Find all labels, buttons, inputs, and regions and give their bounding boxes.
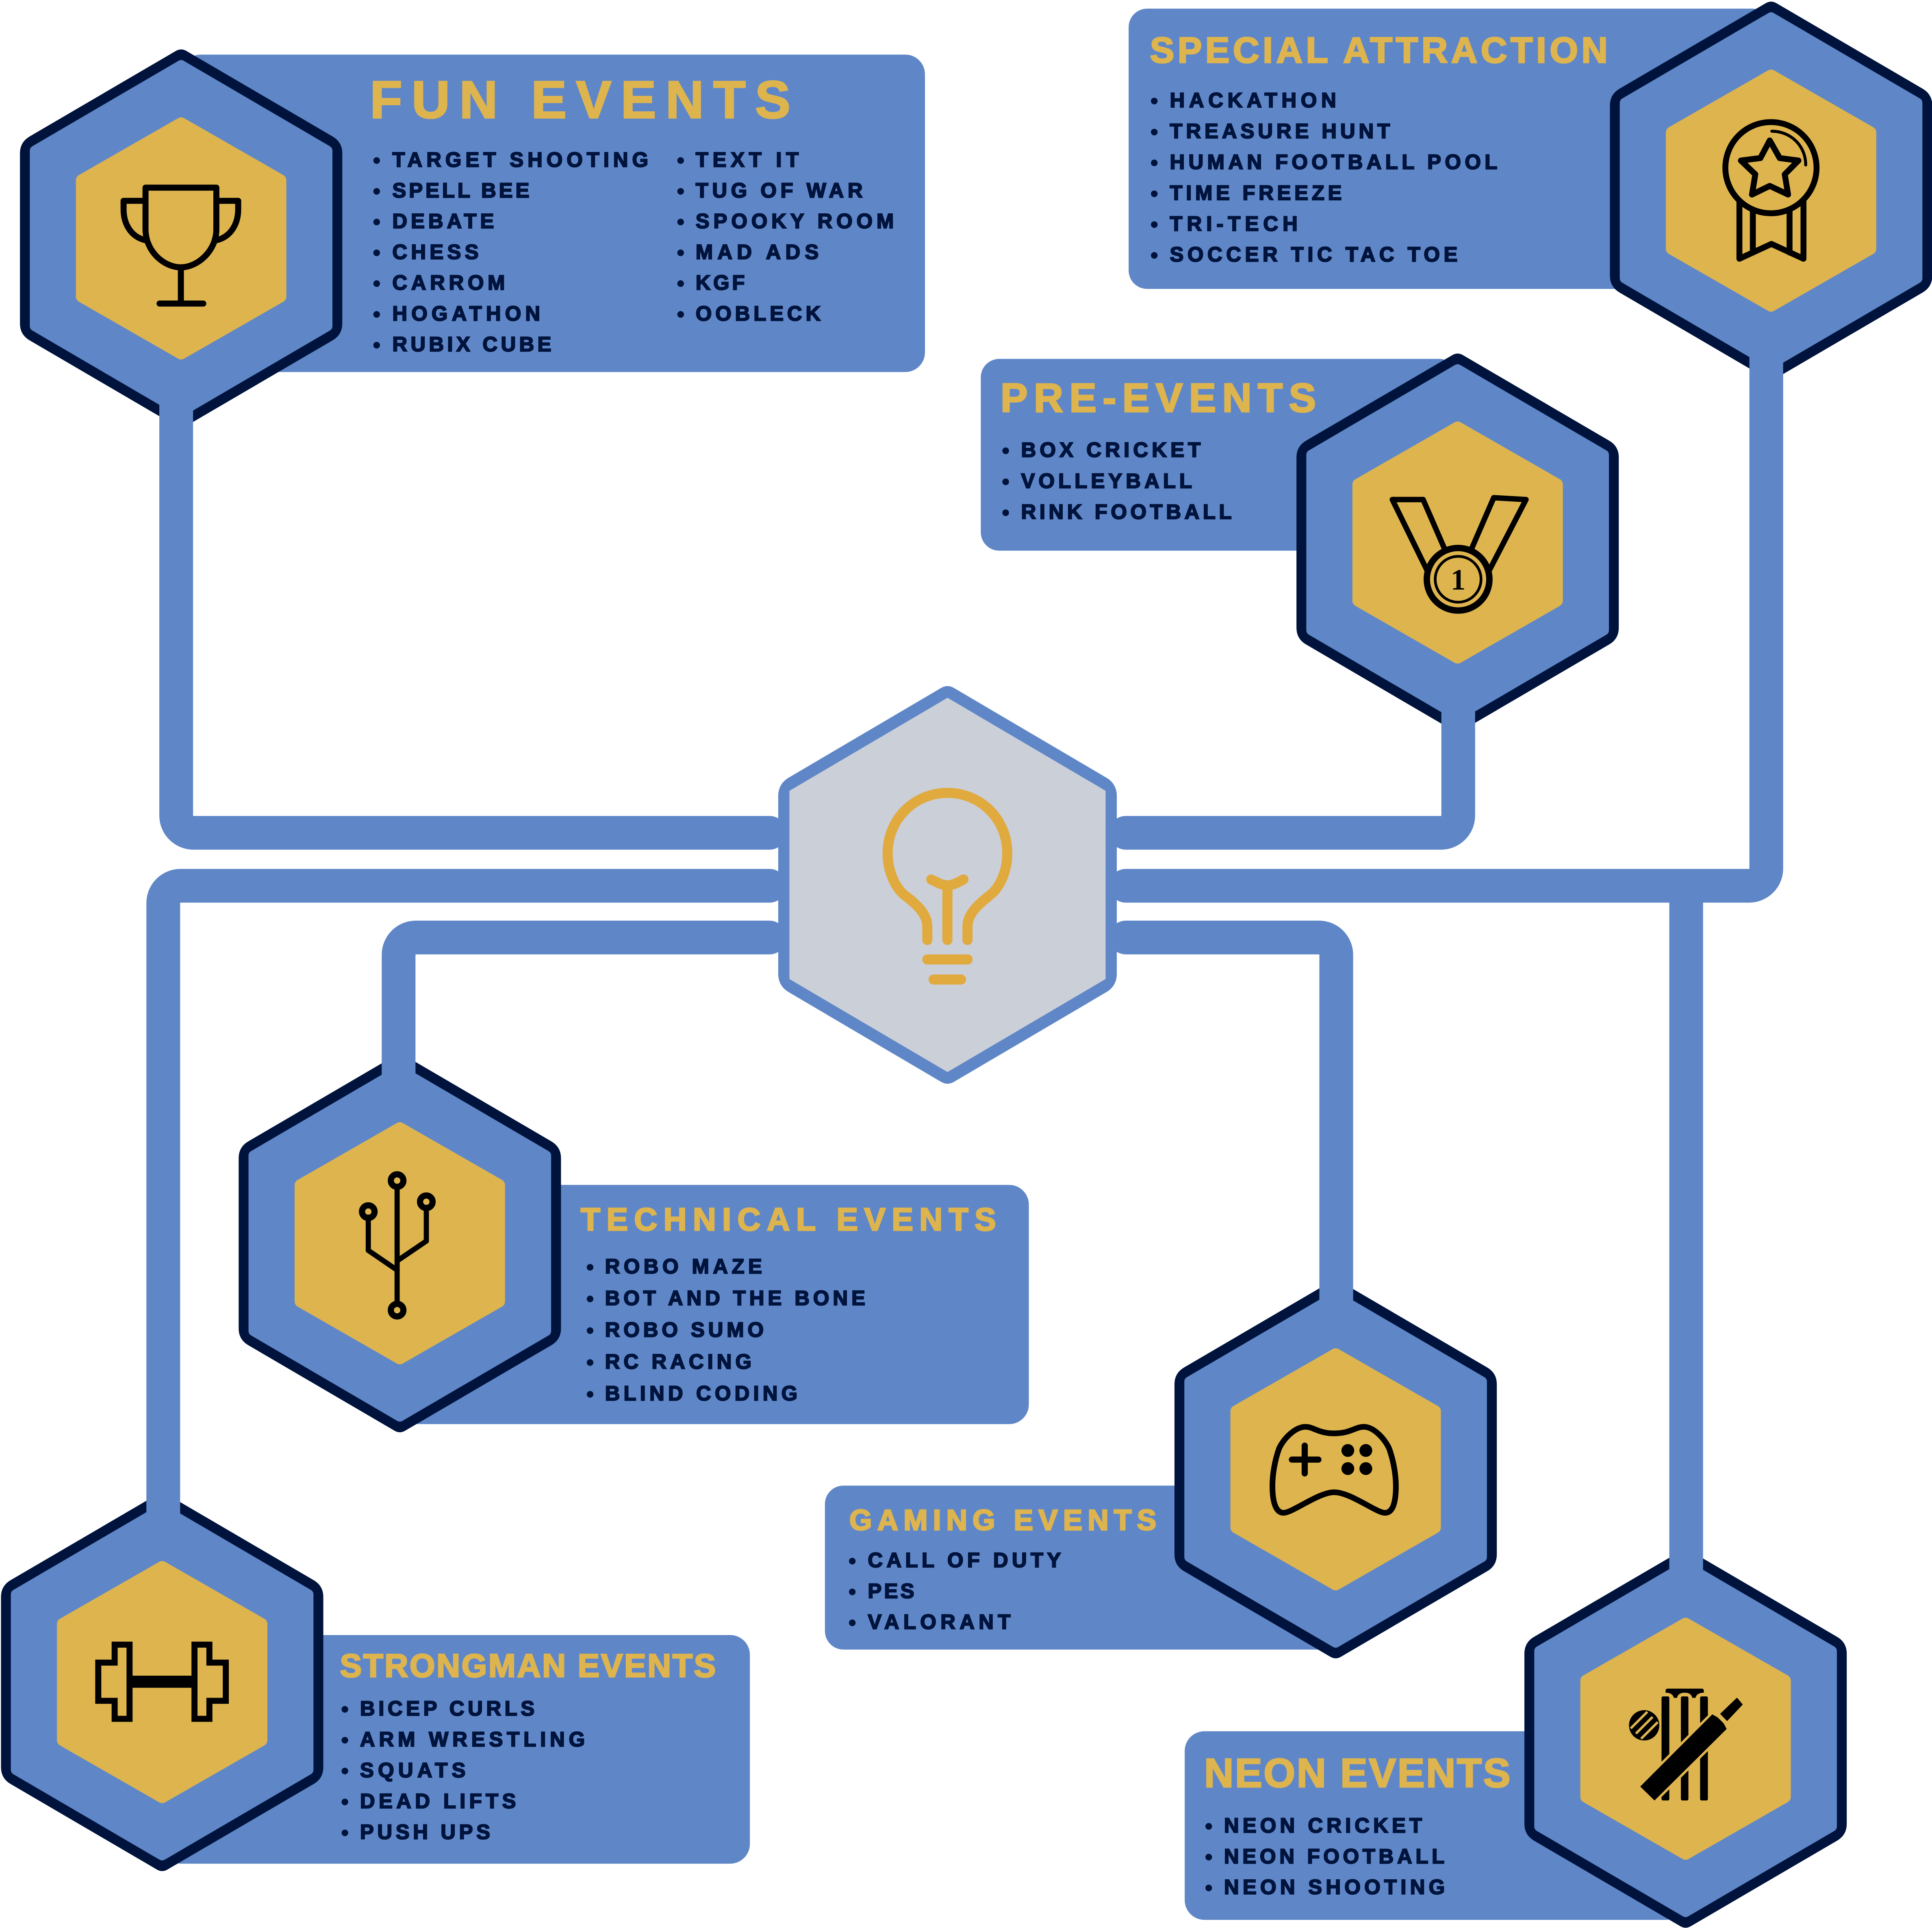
list: fun events column two: KGF [696,271,745,294]
list: technical events: ROBO SUMO [605,1318,764,1341]
list: fun events column two: TEXT IT [696,148,799,171]
connectors from centre hub to each event hexagon [163,345,1766,1589]
icon: light bulb [888,793,1007,980]
list: fun events column one: SPELL BEE [392,179,529,202]
list: pre-events [1002,438,1232,523]
panel: neon events [1185,1731,1686,1920]
hexagon: gaming events [1174,1280,1497,1658]
panel: special attraction [1129,9,1771,289]
list: technical events: ROBO MAZE [605,1255,762,1278]
icon: trophy [124,188,238,304]
list: fun events column one [373,148,648,356]
list: fun events column two [677,148,894,325]
list: fun events column one: CARROM [392,271,505,294]
list: technical events: RC RACING [605,1350,751,1373]
list: pre-events: RINK FOOTBALL [1021,500,1232,523]
list: neon events [1205,1814,1445,1899]
list: neon events: NEON CRICKET [1224,1814,1422,1837]
centre hexagon hub [778,686,1117,1084]
list: fun events column two: SPOOKY ROOM [696,210,894,233]
hexagon: strongman events [1,1493,323,1871]
list: technical events [587,1255,865,1405]
hexagon: fun events [20,50,342,427]
heading: technical events: TECHNICAL EVENTS [581,1201,996,1237]
heading: fun events: FUN EVENTS [370,70,790,129]
list: neon events: NEON FOOTBALL [1224,1845,1444,1868]
list: strongman events: BICEP CURLS [360,1697,534,1720]
list: neon events: NEON SHOOTING [1224,1876,1445,1899]
list: fun events column one: CHESS [392,240,479,263]
list: technical events: BOT AND THE BONE [605,1286,865,1310]
heading: neon events: NEON EVENTS [1204,1750,1510,1796]
list: special attraction [1151,89,1497,266]
icon: usb circuit [362,1174,432,1316]
list: fun events column two: TUG OF WAR [696,179,863,202]
list: fun events column one: TARGET SHOOTING [392,148,648,171]
list: fun events column one: DEBATE [392,210,494,233]
panel: fun events [181,54,925,372]
panel: gaming events [825,1486,1336,1650]
heading: strongman events: STRONGMAN EVENTS [340,1648,716,1684]
list: gaming events: PES [868,1579,914,1603]
panel: strongman events [161,1635,750,1864]
hexagon: pre-events [1296,354,1619,731]
icon: first place medal [1392,498,1526,611]
hexagon: technical events [239,1054,561,1432]
list: special attraction: HACKATHON [1170,89,1336,112]
icon: rosette medal with star [1726,122,1817,259]
list: strongman events [341,1697,585,1843]
list: strongman events: PUSH UPS [360,1820,490,1843]
list: pre-events: BOX CRICKET [1021,438,1200,462]
panel: pre-events [981,359,1458,551]
list: special attraction: TRI-TECH [1170,212,1298,235]
list: gaming events: CALL OF DUTY [868,1548,1061,1572]
list: technical events: BLIND CODING [605,1382,797,1405]
panel: technical events [399,1185,1029,1424]
heading: gaming events: GAMING EVENTS [849,1505,1156,1537]
list: strongman events: SQUATS [360,1759,465,1782]
list: fun events column two: OOBLECK [696,302,821,325]
icon: dumbbell [98,1645,226,1719]
list: fun events column one: HOGATHON [392,302,540,325]
heading: pre-events: PRE-EVENTS [1001,375,1316,421]
list: strongman events: DEAD LIFTS [360,1789,516,1813]
list: pre-events: VOLLEYBALL [1021,469,1192,492]
list: special attraction: TREASURE HUNT [1170,119,1390,143]
hexagon: neon events [1524,1550,1847,1928]
icon: cricket bat, wickets and ball [1629,1689,1742,1800]
list: strongman events: ARM WRESTLING [360,1728,585,1751]
list: fun events column two: MAD ADS [696,240,818,263]
list: gaming events [849,1548,1061,1633]
list: special attraction: TIME FREEZE [1170,181,1342,204]
icon: game controller [1272,1427,1396,1513]
list: gaming events: VALORANT [868,1610,1010,1633]
list: fun events column one: RUBIX CUBE [392,333,551,356]
hexagon: special attraction [1610,2,1932,380]
list: special attraction: HUMAN FOOTBALL POOL [1170,150,1497,173]
list: special attraction: SOCCER TIC TAC TOE [1170,243,1457,266]
icon: first place medal: 1 [1451,563,1465,596]
heading: special attraction: SPECIAL ATTRACTION [1150,30,1608,70]
